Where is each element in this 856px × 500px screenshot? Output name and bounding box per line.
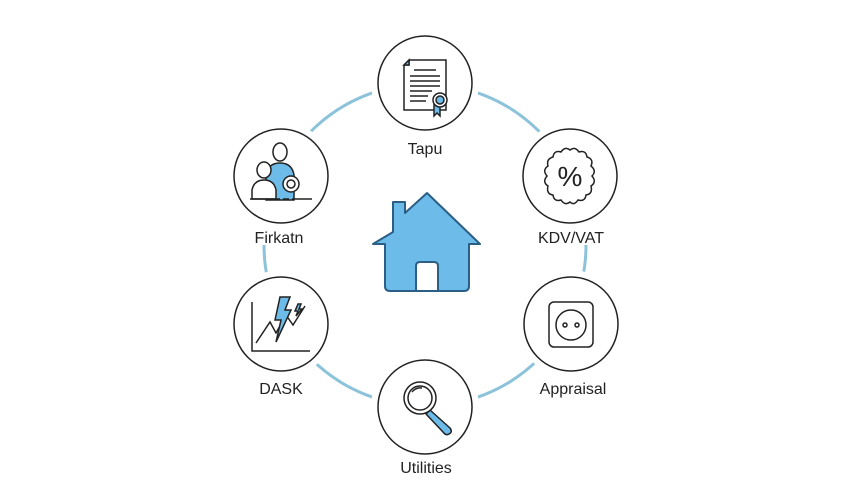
node: Firkatn — [234, 129, 328, 223]
icon: power socket — [549, 302, 593, 347]
label: Tapu: Tapu — [408, 141, 442, 158]
label: KDV/VAT: KDV/VAT — [538, 230, 604, 247]
label: DASK — [255, 376, 305, 398]
label: DASK: DASK — [259, 381, 303, 398]
icon: percent badge: % — [558, 161, 582, 192]
node: Appraisal — [524, 277, 618, 371]
label: Tapu — [400, 136, 450, 158]
node: KDV/VAT — [523, 129, 617, 223]
label: Appraisal: Appraisal — [540, 381, 606, 398]
node: Tapu — [378, 36, 472, 130]
ring connector — [264, 84, 586, 406]
node: DASK — [234, 277, 328, 371]
icon: people with badge — [250, 143, 312, 200]
icon: magnifier — [404, 382, 451, 435]
node: Utilities — [378, 360, 472, 454]
label: Utilities: Utilities — [400, 460, 452, 477]
label: Firkatn — [248, 225, 310, 247]
house icon — [373, 193, 480, 291]
label: Appraisal — [536, 376, 610, 398]
label: Firkatn: Firkatn — [255, 230, 303, 247]
label: Utilities — [390, 455, 460, 477]
icon: document with seal — [404, 60, 447, 116]
icon: lightning chart — [252, 297, 310, 351]
